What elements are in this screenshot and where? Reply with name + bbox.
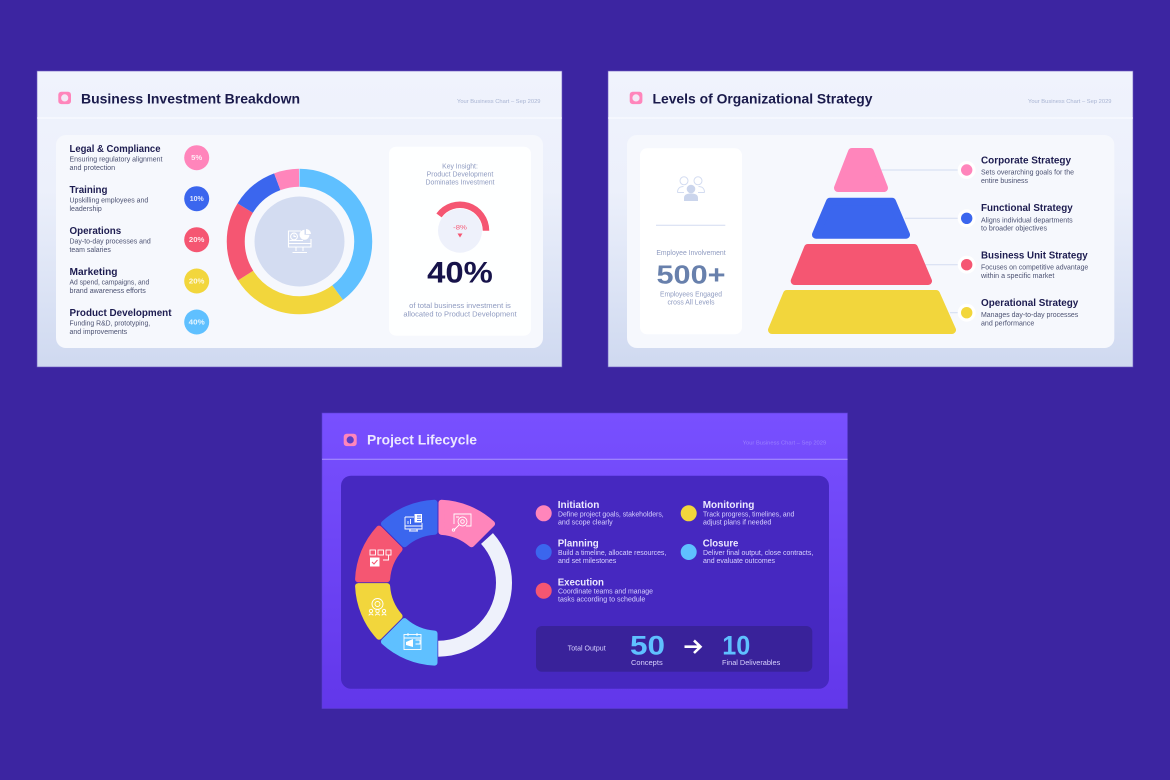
insight heading: Dominates Investment xyxy=(426,180,495,186)
item: training: 10% xyxy=(190,196,204,203)
card: employee involvement xyxy=(640,148,742,334)
item: product development: Funding R&D, prototyping, xyxy=(70,321,150,328)
text: functional strategy: Functional Strategy xyxy=(981,203,1073,214)
item: training: Training xyxy=(70,185,108,196)
icon: people xyxy=(678,177,704,201)
item: legal xyxy=(70,144,209,172)
text: functional strategy: to broader objectives xyxy=(981,225,1048,232)
item: closure: Deliver final output, close contracts, xyxy=(703,550,813,557)
item: execution: tasks according to schedule xyxy=(558,597,645,604)
pyramid tier: functional xyxy=(816,202,906,235)
insight heading: Key Insight: xyxy=(442,164,478,171)
text: business unit strategy: within a specific market xyxy=(980,273,1054,280)
icon: title marker xyxy=(344,434,357,446)
insight description xyxy=(403,303,517,319)
icon: monitor with charts xyxy=(288,229,311,252)
item: legal: Legal & Compliance xyxy=(70,144,161,155)
pyramid tier: operational xyxy=(772,294,952,330)
item: product development: 40% xyxy=(189,320,206,326)
legend dots xyxy=(958,161,976,322)
item: marketing: Ad spend, campaigns, and xyxy=(70,280,149,287)
item: operations: Day-to-day processes and xyxy=(70,239,151,246)
text: operational strategy xyxy=(981,298,1079,327)
text: functional strategy: Aligns individual departments xyxy=(981,217,1073,224)
output summary bar xyxy=(536,626,812,672)
insight heading xyxy=(426,164,495,186)
icon: target screen xyxy=(452,514,471,531)
big number: 40 percent: 40% xyxy=(427,256,493,289)
big number: 500+: 500+ xyxy=(656,260,726,290)
inner panel xyxy=(341,476,829,689)
item: training: leadership xyxy=(70,206,102,213)
header date: Your Business Chart – Sep 2029 xyxy=(1028,99,1112,105)
item: monitoring: Monitoring xyxy=(703,499,754,511)
text: corporate strategy: entire business xyxy=(981,178,1028,185)
header date: Your Business Chart – Sep 2029 xyxy=(743,441,826,447)
donut chart: investment share xyxy=(236,178,363,305)
panel: business investment breakdown xyxy=(37,71,562,367)
icon: title marker xyxy=(58,92,71,104)
list: investment categories xyxy=(70,144,209,336)
item: legal: 5% xyxy=(191,155,203,162)
item: monitoring xyxy=(681,499,794,526)
segment: closure xyxy=(384,621,435,663)
label: total output: Total Output xyxy=(568,646,606,653)
icon: title marker xyxy=(630,92,642,104)
item: training xyxy=(70,185,209,213)
item: legal: Ensuring regulatory alignment xyxy=(70,157,163,164)
item: execution: Coordinate teams and manage xyxy=(558,589,653,596)
gauge: minus 8 percent: -8% xyxy=(453,226,468,232)
item: training: Upskilling employees and xyxy=(70,198,148,205)
item: planning: and set milestones xyxy=(558,558,617,565)
panel: levels of organizational strategy xyxy=(608,71,1133,367)
segment: execution xyxy=(358,529,400,579)
item: planning: Build a timeline, allocate resources, xyxy=(558,550,666,557)
stat description: Employees Engaged xyxy=(660,291,722,298)
item: initiation xyxy=(536,499,664,526)
item: operations: 20% xyxy=(189,237,205,244)
item: product development: and improvements xyxy=(70,329,128,336)
item: closure: Closure xyxy=(703,538,739,550)
text: corporate strategy xyxy=(981,156,1074,185)
item: closure xyxy=(681,538,813,565)
item: initiation: and scope clearly xyxy=(558,519,613,526)
inner panel xyxy=(627,135,1114,348)
item: monitoring: Track progress, timelines, and xyxy=(703,511,794,518)
text: business unit strategy: Business Unit Strategy xyxy=(981,251,1088,262)
item: marketing: 20% xyxy=(189,278,205,286)
item: product development xyxy=(70,308,209,336)
text: business unit strategy: Focuses on competitive advantage xyxy=(981,265,1088,272)
pyramid tier: corporate xyxy=(838,152,884,188)
stat: 10 final deliverables: 10 xyxy=(722,630,750,660)
item: operations xyxy=(70,226,209,254)
gauge: minus 8 percent xyxy=(438,205,486,253)
arrow xyxy=(684,640,700,653)
text: business unit strategy xyxy=(980,251,1088,280)
icon: team target xyxy=(369,598,386,616)
inner panel xyxy=(56,135,543,348)
item: planning xyxy=(536,538,666,565)
item: marketing: brand awareness efforts xyxy=(70,288,146,295)
donut center disc xyxy=(254,196,344,286)
text: corporate strategy: Corporate Strategy xyxy=(981,156,1071,167)
stat label: Employee Involvement xyxy=(656,250,726,257)
pyramid tier: business unit xyxy=(795,248,928,281)
segment: planning xyxy=(384,488,449,553)
text: functional strategy xyxy=(981,203,1073,232)
stat: 10 final deliverables xyxy=(722,630,781,667)
stat: 50 concepts: Concepts xyxy=(631,660,663,667)
icon: dashboard monitor xyxy=(405,514,422,531)
panel: project lifecycle xyxy=(322,413,848,708)
insight heading: Product Development xyxy=(427,172,493,178)
segment: initiation xyxy=(441,503,492,544)
icon: calendar megaphone xyxy=(404,633,421,650)
header date: Your Business Chart – Sep 2029 xyxy=(457,99,540,105)
heading: project lifecycle: Project Lifecycle xyxy=(367,432,477,448)
card: key insight xyxy=(389,147,531,336)
legend: phases xyxy=(536,499,813,604)
item: marketing: Marketing xyxy=(70,267,118,278)
item: execution: Execution xyxy=(558,577,604,589)
item: planning: Planning xyxy=(558,538,599,550)
stat description xyxy=(660,291,722,306)
text: corporate strategy: Sets overarching goals for the xyxy=(981,170,1074,177)
pyramid chart xyxy=(772,152,952,330)
stat description: cross All Levels xyxy=(668,299,715,306)
icon: workflow check xyxy=(370,550,391,566)
item: closure: and evaluate outcomes xyxy=(703,558,775,565)
item: initiation: Initiation xyxy=(558,499,599,511)
item: operations: Operations xyxy=(70,226,122,237)
item: marketing xyxy=(70,267,209,295)
stat: 50 concepts: 50 xyxy=(630,630,665,660)
item: monitoring: adjust plans if needed xyxy=(703,519,771,526)
text: operational strategy: Manages day-to-day processes xyxy=(981,312,1079,319)
segment: monitoring xyxy=(343,572,408,637)
text: operational strategy: and performance xyxy=(981,320,1034,327)
heading: organizational strategy: Levels of Organizational Strategy xyxy=(652,90,873,106)
item: operations: team salaries xyxy=(70,247,111,254)
item: legal: and protection xyxy=(70,165,115,172)
insight description: allocated to Product Development xyxy=(403,312,517,319)
text: operational strategy: Operational Strategy xyxy=(981,298,1079,309)
item: execution xyxy=(536,577,653,604)
item: product development: Product Development xyxy=(70,308,172,319)
connector lines xyxy=(880,170,960,313)
item: initiation: Define project goals, stakeholders, xyxy=(558,511,664,518)
stat: 10 final deliverables: Final Deliverables xyxy=(722,660,781,667)
lifecycle ring chart xyxy=(343,488,504,663)
heading: business investment: Business Investment Breakdown xyxy=(81,90,300,106)
insight description: of total business investment is xyxy=(409,303,511,310)
